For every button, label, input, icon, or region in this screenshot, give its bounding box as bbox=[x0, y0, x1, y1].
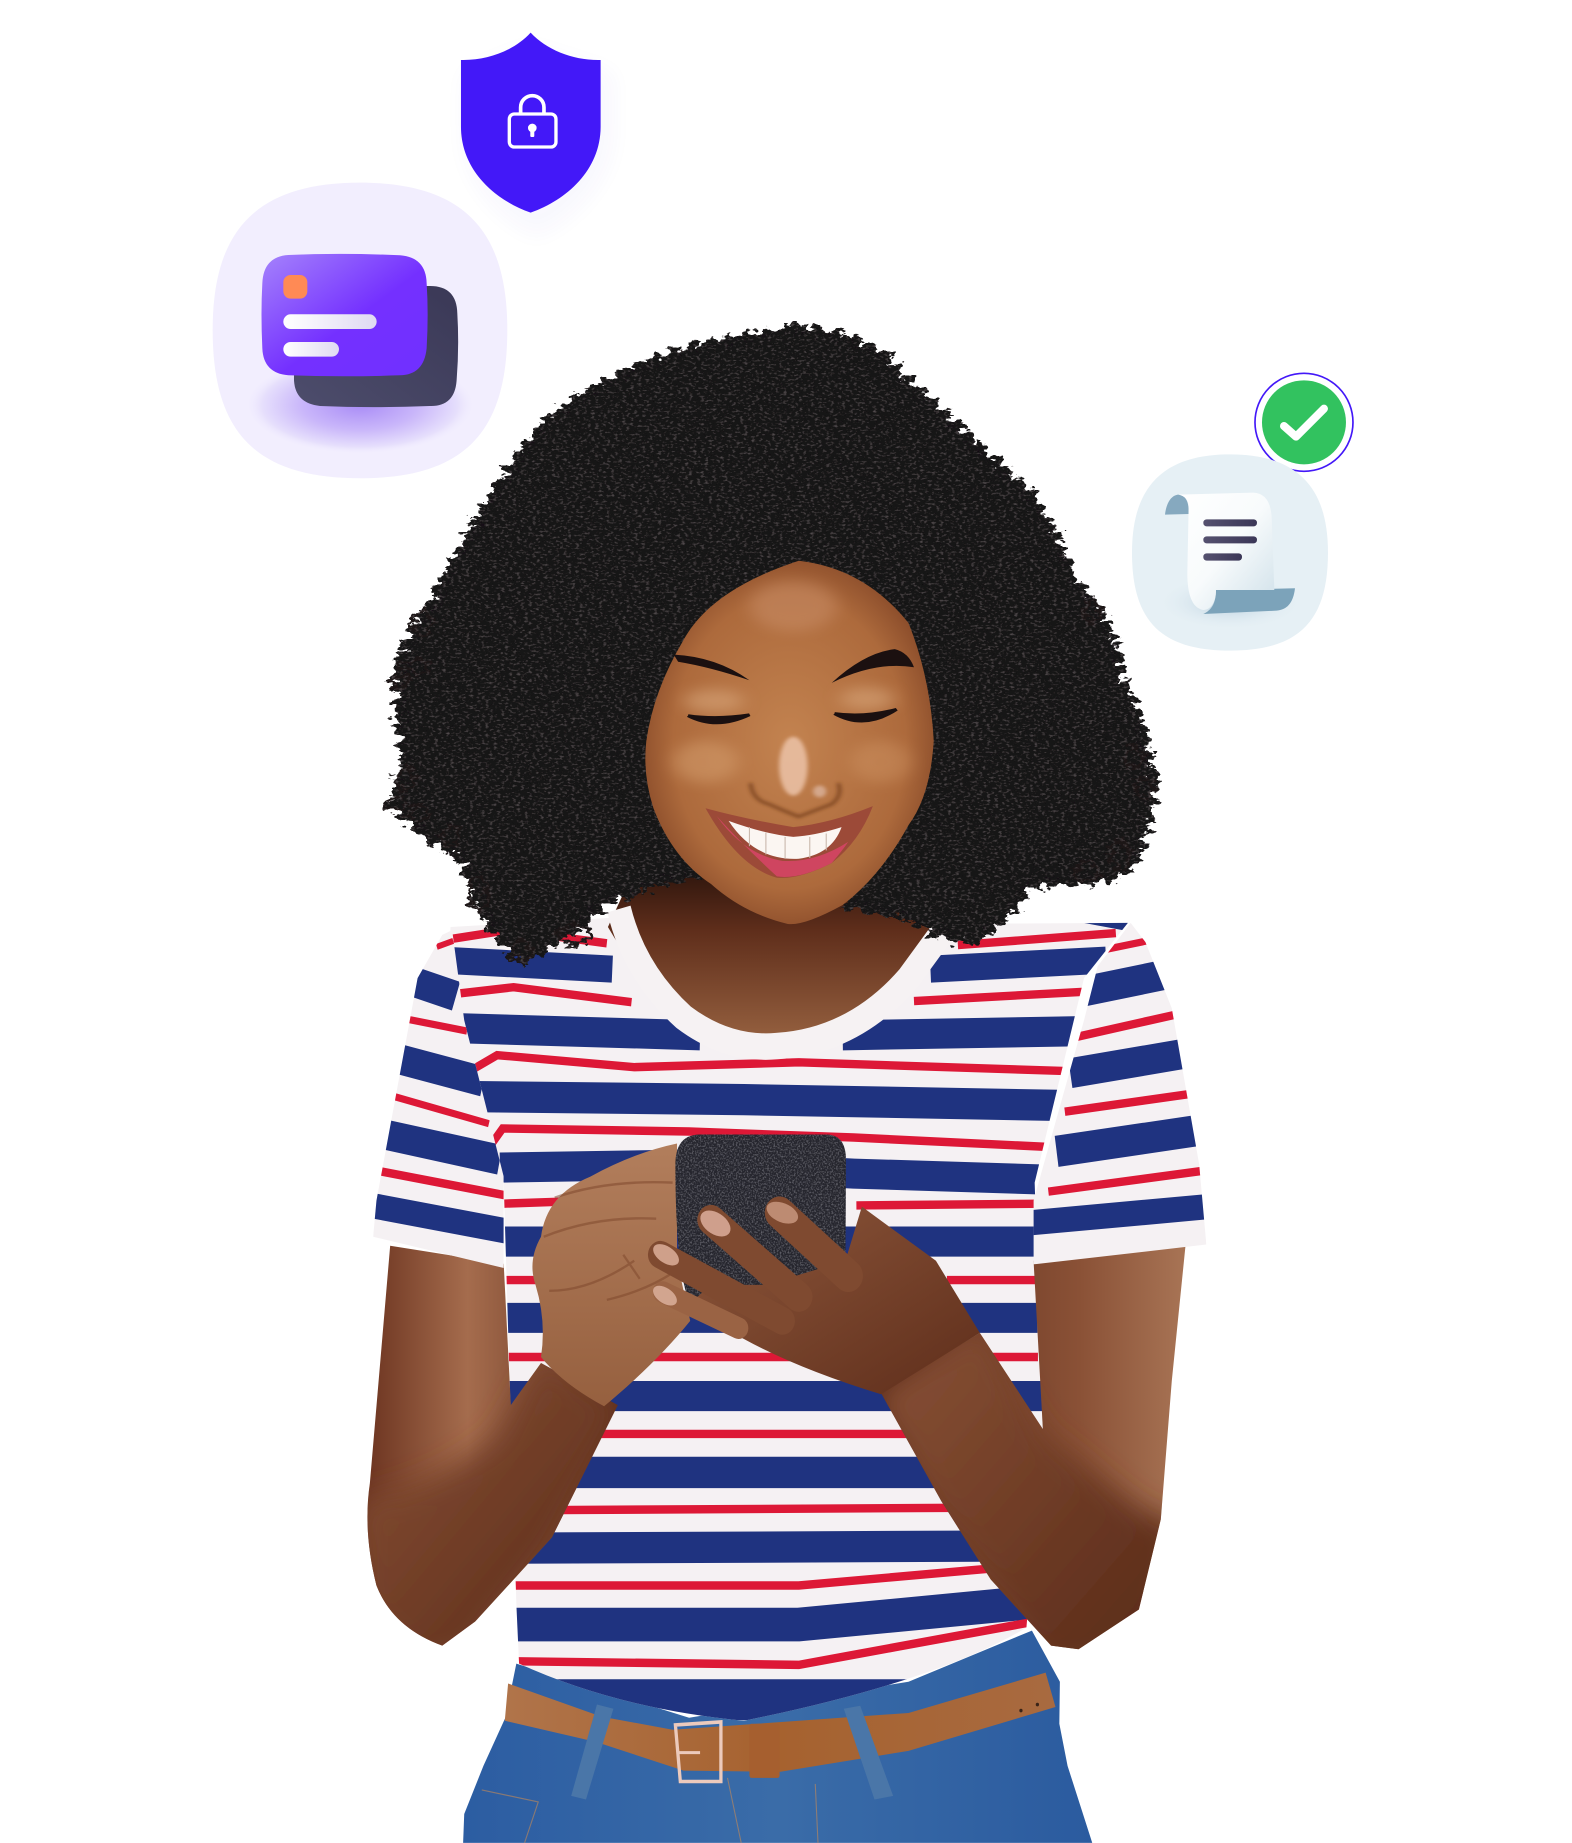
figure: woman body with striped shirt, jeans and phone bbox=[360, 858, 1216, 1843]
shirt collar bbox=[619, 909, 941, 1047]
right cheek highlight bbox=[851, 741, 911, 783]
padlock bbox=[509, 96, 556, 147]
card line long bbox=[283, 314, 377, 329]
shirt torso bbox=[450, 918, 1128, 1721]
scroll bottom fold bbox=[1203, 588, 1295, 614]
forehead highlight bbox=[749, 581, 837, 631]
scroll top curl bbox=[1165, 495, 1189, 515]
smartphone back bbox=[675, 1135, 846, 1302]
card line short bbox=[283, 342, 339, 357]
badge disc bbox=[1262, 380, 1346, 464]
icon: verified green check badge bbox=[1255, 373, 1353, 471]
left eyebrow bbox=[674, 655, 749, 680]
scroll glow bbox=[1156, 575, 1304, 631]
curly hair bbox=[387, 328, 1153, 962]
figure: head with curly hair and face bbox=[387, 328, 1153, 962]
text line 2 bbox=[1203, 536, 1257, 543]
neck bbox=[608, 858, 933, 1040]
check mark bbox=[1284, 409, 1324, 437]
card glow bbox=[245, 356, 475, 454]
tile background bbox=[1132, 454, 1328, 651]
left sleeve bbox=[374, 932, 504, 1268]
right closed eye bbox=[834, 709, 896, 721]
left closed eye bbox=[688, 715, 749, 723]
badge ring bbox=[1255, 373, 1353, 471]
right arm bbox=[881, 1246, 1185, 1649]
left cheek highlight bbox=[673, 741, 738, 783]
belt bbox=[505, 1673, 1055, 1800]
left arm bbox=[367, 1246, 618, 1646]
hair mass bbox=[396, 328, 1153, 962]
smile bbox=[706, 806, 873, 878]
text line 1 bbox=[1203, 519, 1257, 526]
purple front card bbox=[261, 254, 428, 376]
right hand with fingers over phone bbox=[650, 1197, 980, 1394]
icon: payment cards in lavender tile bbox=[213, 183, 507, 478]
dark back card bbox=[294, 286, 458, 407]
tile background bbox=[213, 183, 507, 478]
right sleeve bbox=[1034, 923, 1206, 1264]
left hand bbox=[532, 1144, 690, 1406]
shield body bbox=[461, 33, 601, 213]
nose bbox=[751, 737, 840, 817]
jeans bbox=[463, 1631, 1092, 1843]
scroll paper bbox=[1178, 493, 1274, 610]
orange chip bbox=[283, 275, 307, 299]
loose curls bbox=[387, 600, 1153, 962]
forearm shading bbox=[367, 1333, 1162, 1650]
right eyelid bbox=[840, 687, 895, 711]
shield shadow bbox=[463, 47, 613, 237]
icon: security shield with lock bbox=[461, 33, 613, 237]
icon: document scroll in pale blue tile bbox=[1132, 454, 1328, 651]
text line 3 bbox=[1203, 553, 1242, 561]
right eyebrow bbox=[832, 649, 914, 683]
left eyelid bbox=[684, 689, 744, 713]
face bbox=[645, 561, 934, 924]
